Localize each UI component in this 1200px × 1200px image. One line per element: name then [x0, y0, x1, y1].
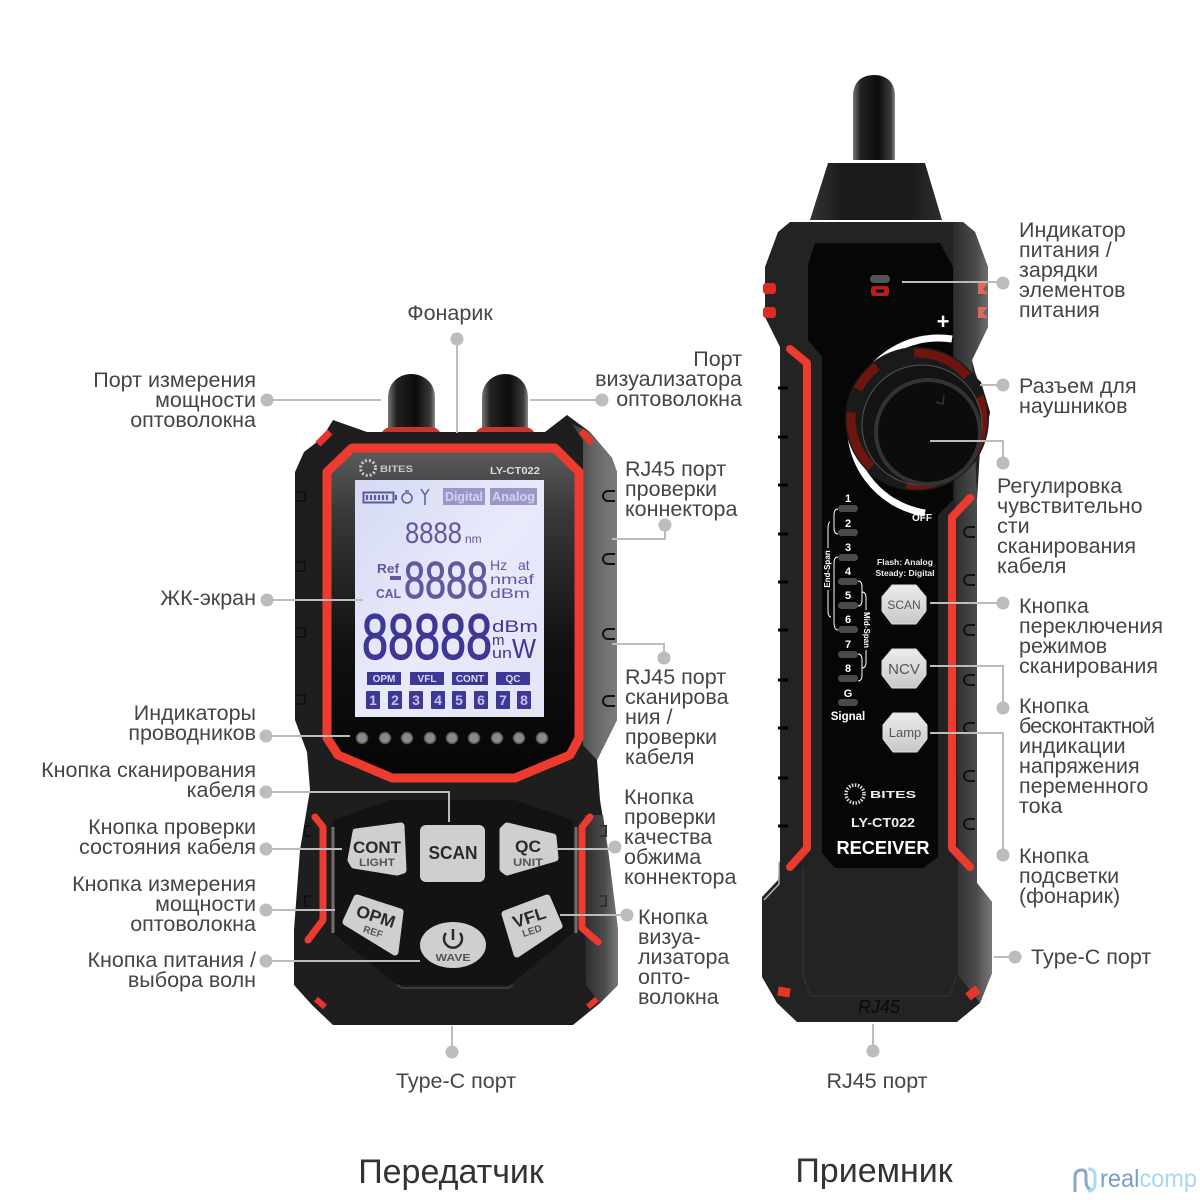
side notches: [778, 388, 975, 829]
callout: RJ45 scan: RJ45 порт: [625, 665, 726, 689]
callout: scan mode button: Кнопка: [1019, 594, 1089, 618]
side red slots: [763, 283, 988, 318]
callout: power indicator: зарядки: [1019, 258, 1098, 282]
button: CONT LIGHT: [351, 826, 403, 872]
callout: transmitter Type-C: [396, 1026, 516, 1093]
lower face bevel: [803, 868, 957, 996]
callout: fiber visualizer port: визуализатора: [595, 367, 742, 391]
callout: NCV button: индикации: [1019, 734, 1126, 758]
side notches: [297, 491, 615, 906]
wire numbers: 2: [391, 692, 399, 708]
callout: RJ45 connector test: коннектора: [625, 497, 737, 521]
button: OPM REF: [346, 898, 400, 952]
reference reading: Hz: [490, 557, 507, 573]
mode tags: Analog: [492, 489, 535, 504]
power reading: dBm: [492, 617, 538, 636]
callout: power indicator: Индикатор: [1019, 218, 1126, 242]
brand logo: BITES: [380, 464, 413, 474]
callout: OPM button: Кнопка измерения: [72, 872, 256, 896]
wire LED column: [831, 493, 865, 723]
callout: receiver RJ45: [826, 1024, 928, 1093]
callout: VFL button: волокна: [638, 985, 719, 1009]
callout: RJ45 scan: проверки: [625, 725, 717, 749]
power reading: W: [512, 633, 537, 664]
red strips: [790, 349, 807, 867]
callout: cable check button: [79, 815, 342, 859]
left connector: [381, 374, 441, 434]
callout: NCV button: [930, 666, 1155, 818]
callout: scan mode button: режимов: [1019, 634, 1107, 658]
mode tags: Digital: [445, 489, 483, 504]
centre black panel: [808, 243, 953, 868]
red top accents: [318, 431, 592, 444]
callout: scan mode button: переключения: [1019, 614, 1163, 638]
callout: power button: выбора волн: [128, 968, 256, 992]
plus mark: +: [937, 309, 949, 334]
callout: NCV button: Кнопка: [1019, 694, 1089, 718]
callout: headphone jack: Разъем для: [1019, 374, 1137, 398]
callout: sensitivity dial: кабеля: [997, 554, 1066, 578]
callout: cable check button: Кнопка проверки: [88, 815, 256, 839]
callout: fiber visualizer port: [530, 347, 742, 411]
right connector: [475, 374, 535, 434]
button: OPM REF: OPM: [354, 902, 398, 932]
callout: lamp button: Кнопка: [1019, 844, 1089, 868]
transmitter body: [294, 415, 618, 1025]
reference reading: dBm: [490, 585, 530, 601]
callout: VFL button: Кнопка: [638, 905, 708, 929]
callout: headphone jack: наушников: [1019, 394, 1128, 418]
receiver logo: BITES: [870, 789, 916, 801]
reference reading: CAL: [376, 586, 401, 601]
button: VFL LED: [505, 898, 559, 954]
button: SCAN: SCAN: [887, 598, 921, 612]
callout: wire indicators: Индикаторы: [134, 701, 256, 725]
callout: QC button: проверки: [624, 805, 716, 829]
button: QC UNIT: [503, 826, 555, 872]
wire indicator LEDs: [356, 732, 548, 744]
reference reading: 8888: [404, 552, 488, 610]
probe tip: [853, 75, 895, 160]
callout: RJ45 scan: [612, 644, 729, 769]
callout: LCD: [160, 586, 363, 610]
callout: QC button: Кнопка: [624, 785, 694, 809]
callout: VFL button: лизатора: [638, 945, 729, 969]
right side facet: [572, 424, 617, 760]
callout: wire indicators: проводников: [128, 721, 256, 745]
callout: RJ45 scan: сканирова: [625, 685, 729, 709]
power reading: 88888: [362, 601, 492, 673]
receiver body: [762, 222, 992, 1022]
wire numbers: 7: [499, 692, 507, 708]
function tabs: VFL: [418, 674, 436, 685]
callout: scan mode button: сканирования: [1019, 654, 1158, 678]
wavelength reading: 8888: [405, 517, 462, 550]
wire LED column: 5: [845, 590, 851, 602]
callout: wire indicators: [128, 701, 350, 745]
power reading: m: [492, 632, 504, 649]
LCD display: [355, 480, 544, 717]
callout: receiver RJ45: RJ45 порт: [826, 1069, 928, 1093]
Mid-Span label: Mid-Span: [862, 612, 871, 648]
wire LED column: 2: [845, 518, 851, 530]
receiver name: RECEIVER: [836, 837, 930, 858]
callout: RJ45 scan: кабеля: [625, 745, 694, 769]
reference reading: nmaf: [490, 571, 534, 587]
callout: fiber power port: мощности: [155, 388, 256, 412]
wire numbers: 1: [369, 692, 377, 708]
button: Lamp: [883, 713, 927, 752]
red corner clips: [316, 999, 597, 1007]
function tabs: [367, 672, 530, 685]
callout: headphone jack: [980, 374, 1137, 418]
lower right facet: [584, 815, 618, 1003]
screen frame: [327, 448, 579, 778]
left highlight edge: [764, 862, 779, 900]
wire LED column: 7: [845, 639, 851, 651]
callout: receiver Type-C: Type-C порт: [1031, 945, 1151, 969]
button: NCV: [882, 649, 926, 688]
button: SCAN: [882, 585, 926, 624]
wire LED column: 8: [845, 663, 851, 675]
lower facet line: [397, 985, 513, 988]
wire LED column: G: [844, 688, 852, 700]
button: SCAN: SCAN: [428, 843, 478, 863]
grey inner strips: [333, 827, 576, 933]
wire numbers: 3: [412, 692, 420, 708]
button: VFL LED: LED: [521, 923, 543, 940]
callout: OPM button: мощности: [155, 892, 256, 916]
reference reading: Ref: [377, 561, 400, 576]
callout: OPM button: [72, 872, 335, 936]
callout: QC button: обжима: [624, 845, 701, 869]
End-Span label: End-Span: [823, 550, 832, 588]
callout: sensitivity dial: сканирования: [997, 534, 1136, 558]
function tabs: CONT: [456, 674, 484, 685]
callout: NCV button: бесконтактной: [1019, 714, 1155, 738]
button: QC UNIT: QC: [515, 837, 541, 856]
wire numbers: [366, 691, 531, 709]
callout: lamp button: подсветки: [1019, 864, 1119, 888]
wire LED column: 6: [845, 614, 851, 626]
function tabs: OPM: [373, 674, 395, 685]
headphone jack bump: [960, 368, 990, 470]
callout: NCV button: тока: [1019, 794, 1062, 818]
probe cone: [810, 163, 942, 220]
button: power WAVE: [420, 922, 486, 968]
receiver logo: [846, 785, 916, 803]
callout: transmitter Type-C: Type-C порт: [396, 1069, 516, 1093]
wire LED column: 4: [845, 566, 852, 578]
callout: lamp button: [930, 733, 1120, 908]
callout: fiber visualizer port: оптоволокна: [616, 387, 742, 411]
callout: sensitivity dial: чувствительно: [997, 494, 1143, 518]
button: SCAN: [420, 825, 485, 882]
mode tags: [443, 488, 537, 505]
callout: sensitivity dial: [930, 441, 1143, 578]
callout: fiber power port: оптоволокна: [130, 408, 256, 432]
button: CONT LIGHT: CONT: [353, 838, 402, 857]
callout: power button: [88, 948, 420, 992]
callout: scan button: [41, 758, 449, 822]
dial scale arc: [850, 338, 952, 513]
button: power WAVE: WAVE: [436, 953, 471, 964]
scan mode note: Steady: Digital: [875, 568, 935, 578]
wavelength reading: nm: [465, 532, 482, 546]
watermark: realcomp: realcomp: [1100, 1165, 1197, 1193]
callout: VFL button: [560, 905, 729, 1009]
device: transmitter: [294, 374, 618, 1025]
RJ45 mark: RJ45: [858, 997, 901, 1017]
callout: cable check button: состояния кабеля: [79, 835, 256, 859]
status icons: [364, 489, 429, 505]
callout: sensitivity dial: Регулировка: [997, 474, 1122, 498]
callout: power indicator: [902, 218, 1126, 322]
model label: LY-CT022: [490, 466, 540, 477]
span brackets: [828, 509, 866, 681]
right side facet: [953, 222, 992, 1003]
callout: VFL button: опто-: [638, 965, 690, 989]
power reading: un: [492, 645, 512, 662]
heading: receiver: Приемник: [795, 1152, 954, 1190]
button panel: [333, 800, 573, 985]
receiver model: LY-CT022: [851, 816, 915, 830]
red corner clips: [778, 989, 978, 997]
callout: OPM button: оптоволокна: [130, 912, 256, 936]
button: CONT LIGHT: LIGHT: [359, 857, 395, 869]
callout: NCV button: переменного: [1019, 774, 1148, 798]
button: VFL LED: VFL: [510, 903, 548, 932]
callout: power indicator: элементов: [1019, 278, 1126, 302]
callout: scan mode button: [930, 594, 1163, 678]
wire numbers: 5: [455, 692, 463, 708]
brand logo: [360, 460, 413, 476]
callout: scan button: Кнопка сканирования: [41, 758, 256, 782]
callout: LCD: ЖК-экран: [160, 586, 256, 610]
callout: RJ45 connector test: RJ45 порт: [625, 457, 726, 481]
callout: fiber power port: Порт измерения: [93, 368, 256, 392]
reference reading: at: [518, 557, 530, 573]
scan mode note: Flash: Analog: [877, 557, 933, 567]
callout: lamp button: (фонарик): [1019, 884, 1120, 908]
callout: flashlight: Фонарик: [407, 301, 493, 325]
red side strips: [308, 817, 323, 940]
button: OPM REF: REF: [362, 924, 384, 941]
callout: QC button: коннектора: [624, 865, 736, 889]
callout: power button: Кнопка питания /: [88, 948, 256, 972]
device: receiver: [762, 75, 992, 1022]
callout: QC button: качества: [624, 825, 712, 849]
button: Lamp: Lamp: [889, 725, 921, 740]
power indicator LED: [870, 275, 890, 296]
wire LED column: 3: [845, 542, 851, 554]
callout: RJ45 connector test: проверки: [625, 477, 717, 501]
function tabs: QC: [506, 674, 520, 685]
scan mode note: [875, 557, 935, 578]
wire numbers: 4: [434, 692, 442, 708]
wire LED column: 1: [845, 493, 851, 505]
wire numbers: 8: [520, 692, 528, 708]
heading: transmitter: Передатчик: [358, 1153, 545, 1191]
callout: fiber power port: [93, 368, 381, 432]
callout: power indicator: питания: [1019, 298, 1100, 322]
callout: QC button: [556, 785, 736, 889]
button: NCV: NCV: [888, 661, 920, 678]
callout: fiber visualizer port: Порт: [693, 347, 742, 371]
callout: RJ45 connector test: [612, 457, 737, 539]
callout: sensitivity dial: сти: [997, 514, 1030, 538]
callout: RJ45 scan: ния /: [625, 705, 672, 729]
button: QC UNIT: UNIT: [513, 857, 543, 869]
wire numbers: 6: [477, 692, 485, 708]
callout: VFL button: визуа-: [638, 925, 701, 949]
sensitivity dial: [845, 347, 989, 491]
wire LED column: Signal: [831, 711, 865, 723]
callout: NCV button: напряжения: [1019, 754, 1140, 778]
callout: scan button: кабеля: [187, 778, 256, 802]
callout: flashlight: [407, 301, 493, 433]
OFF mark: OFF: [912, 513, 932, 524]
callout: power indicator: питания /: [1019, 238, 1112, 262]
